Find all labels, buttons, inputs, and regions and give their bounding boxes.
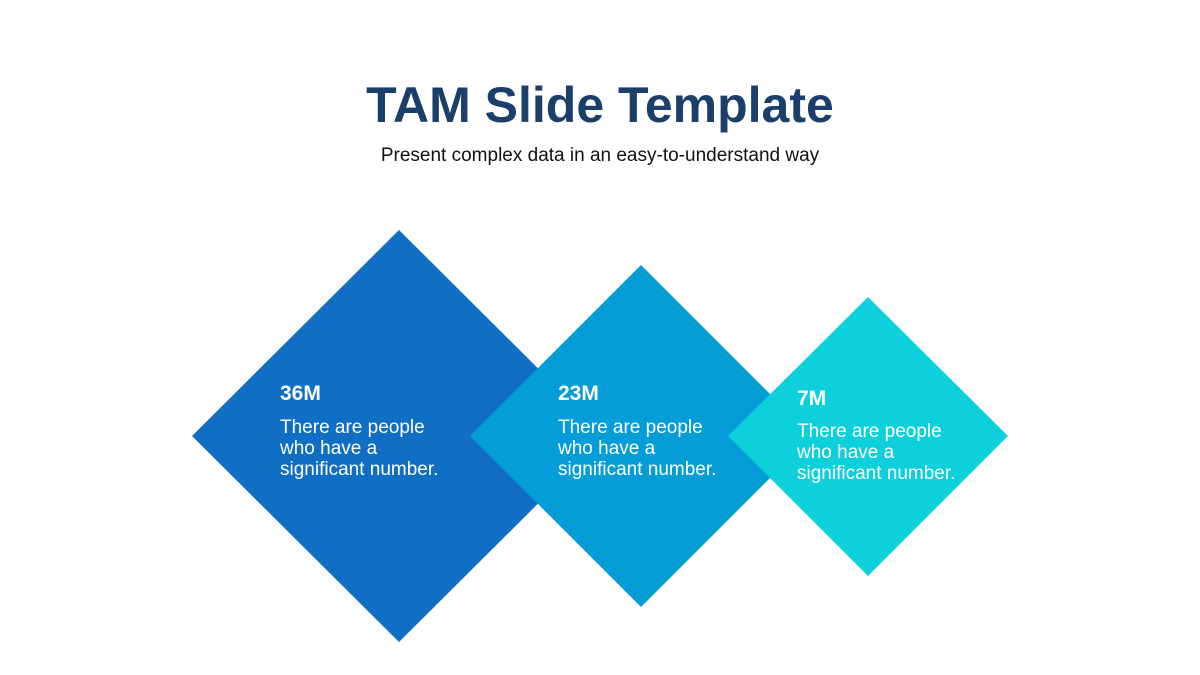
- diamond 1: 36M: 36M: [280, 382, 321, 405]
- diamond 3: 7M: who have a: [796, 442, 895, 463]
- diamond 3: 7M: 7M: [797, 387, 826, 410]
- diamond 2: 23M: significant number.: [558, 459, 716, 480]
- diamond 1: 36M: There are people: [280, 417, 425, 438]
- diamond 1: 36M: who have a: [279, 438, 378, 459]
- diamond 2: 23M: 23M: [558, 382, 599, 405]
- diamond 1: 36M: significant number.: [280, 459, 438, 480]
- subtitle: Present complex data in an easy-to-understand way: [381, 145, 820, 166]
- title: TAM Slide Template: [366, 77, 834, 133]
- diamond 1: 36M: [192, 230, 606, 642]
- diamond 3: 7M: significant number.: [797, 463, 955, 484]
- diamond 3: 7M: There are people: [797, 421, 942, 442]
- diamond 2: 23M: [470, 265, 812, 607]
- diamond 2: 23M: who have a: [557, 438, 656, 459]
- diamond 3: 7M: [728, 297, 1008, 576]
- diamond 2: 23M: There are people: [558, 417, 703, 438]
